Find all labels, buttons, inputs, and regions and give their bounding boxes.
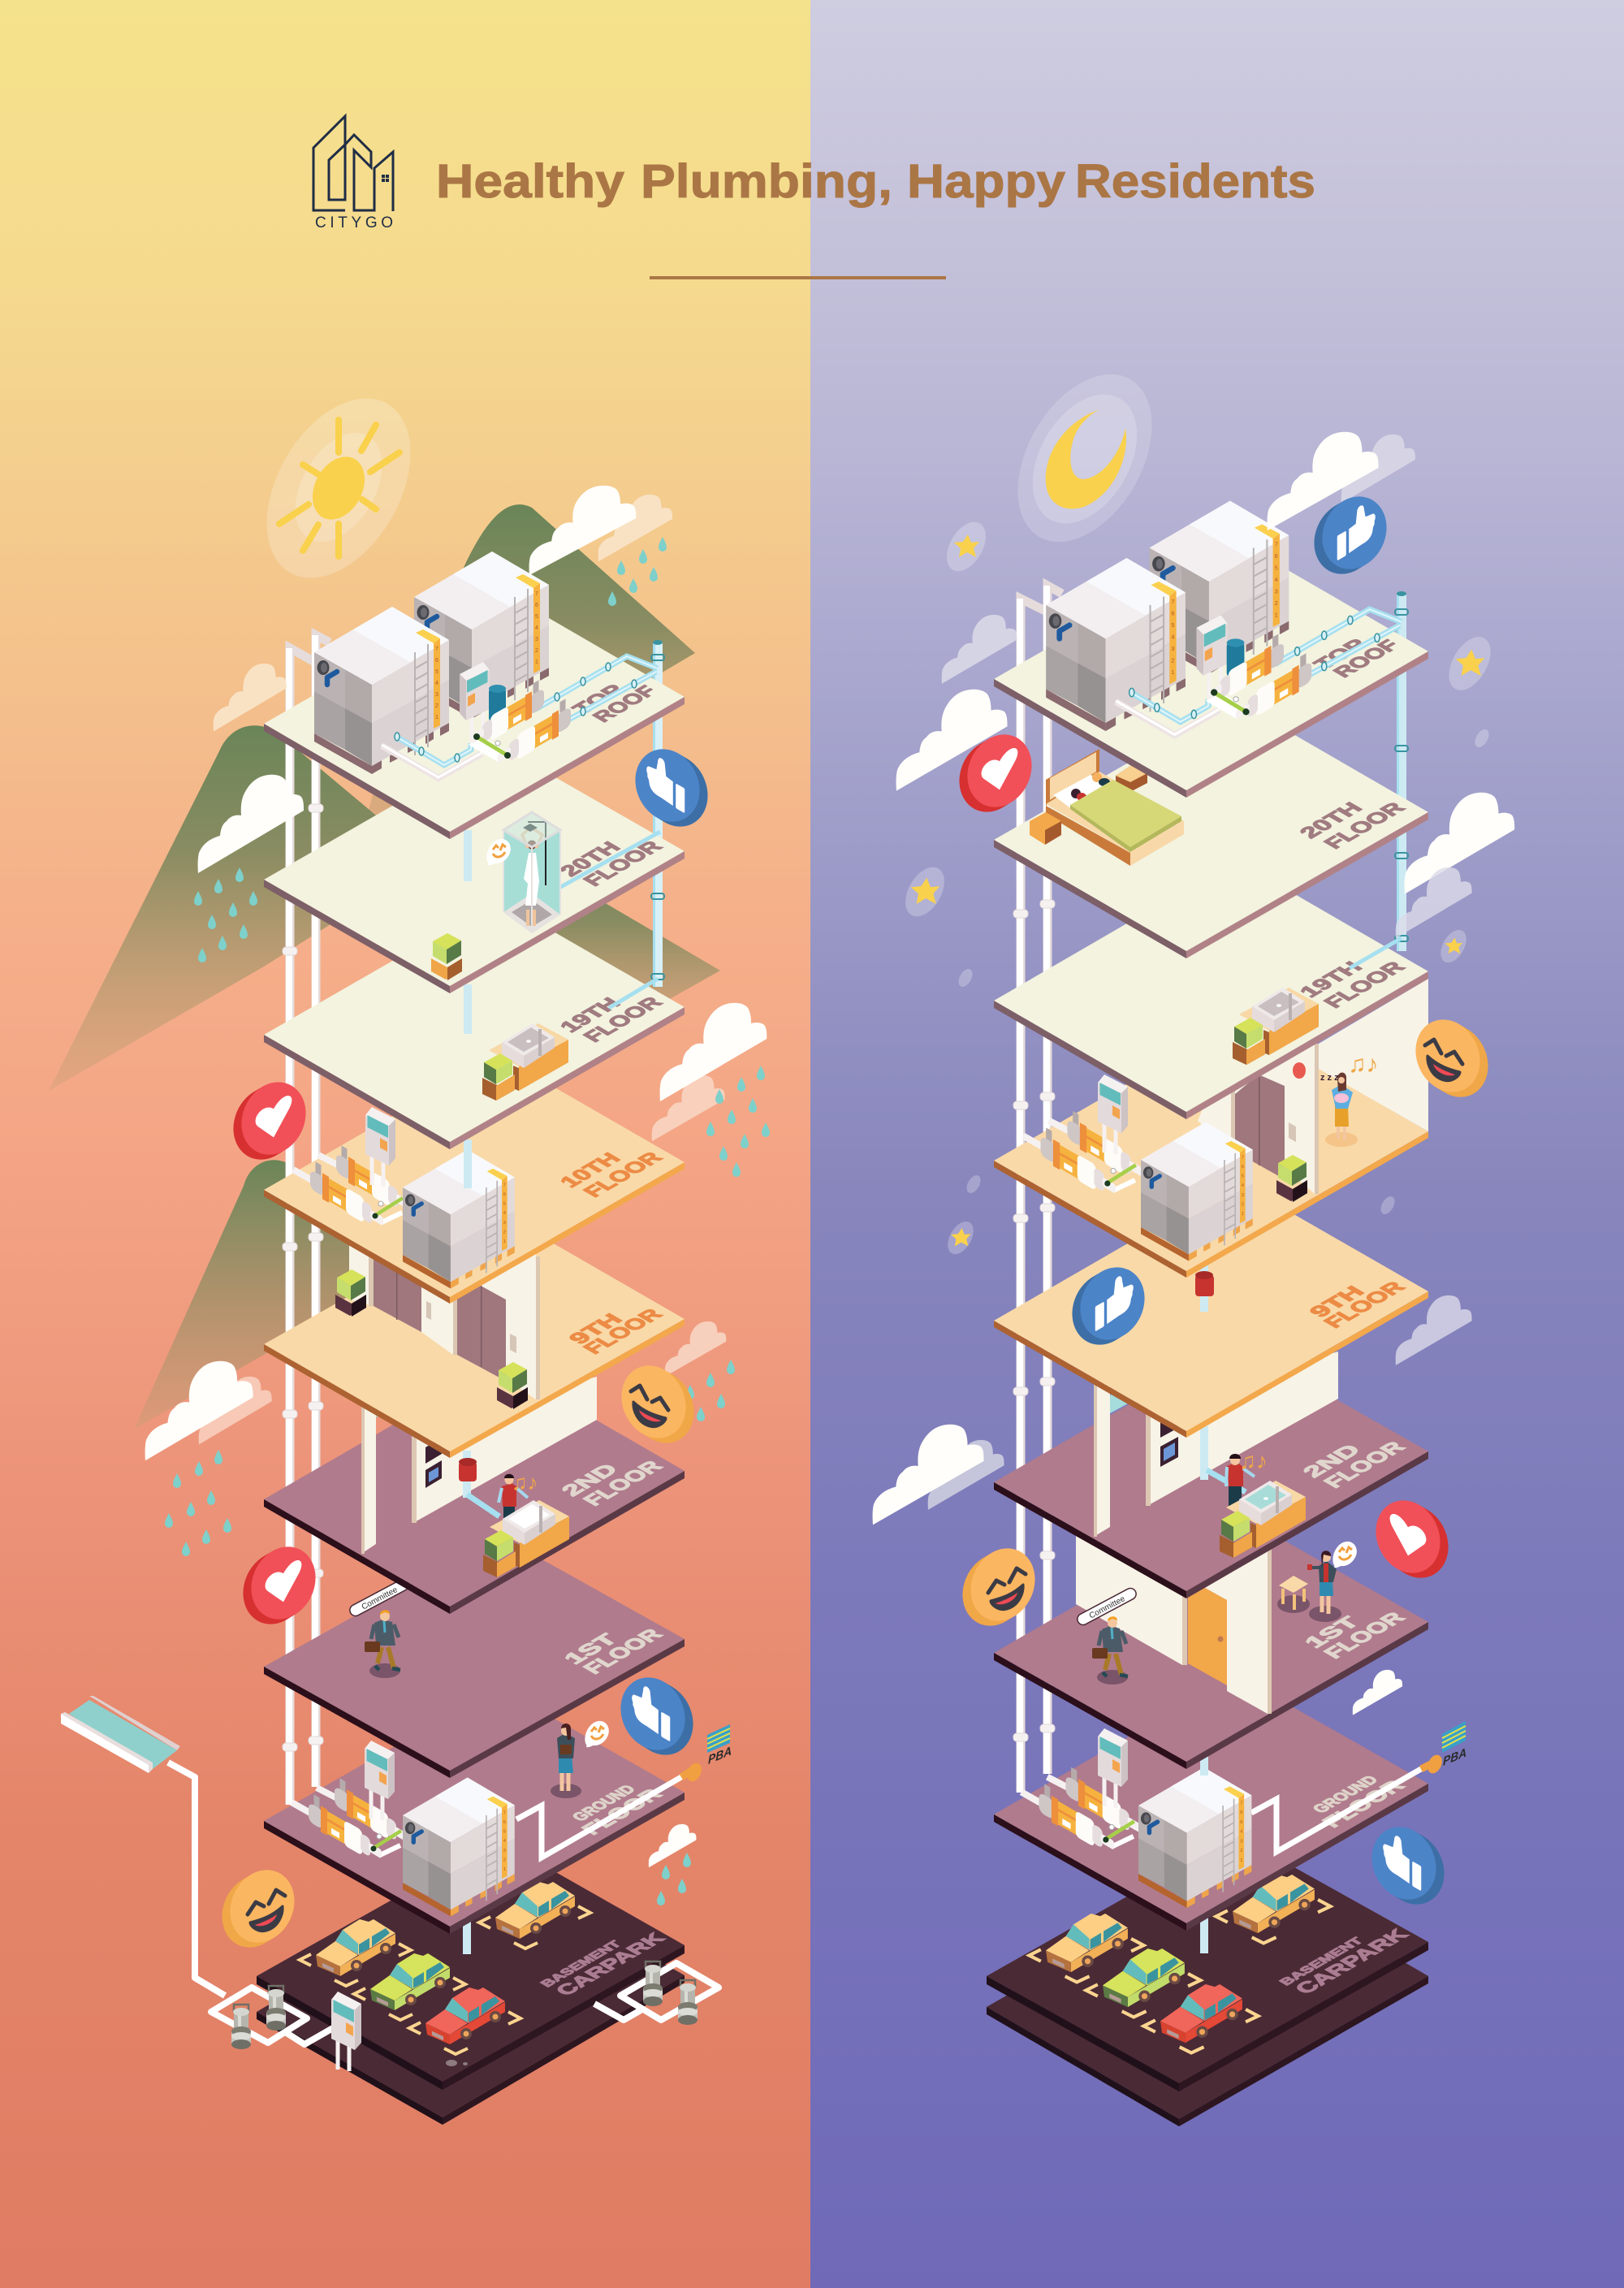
left: blue branch and red valve <box>459 1451 499 1516</box>
right: smile badge upper <box>1404 1009 1500 1108</box>
left: 20th floor slab <box>264 745 685 993</box>
right: parked cars <box>1029 1875 1331 2052</box>
left: smile badge lower <box>210 1859 306 1958</box>
right: roof equipment <box>1046 501 1402 735</box>
left: 20th blue branch <box>558 832 660 889</box>
right column: blue riser <box>1395 591 1408 951</box>
left: basement control panel <box>331 1992 361 2071</box>
left: plant by elevator <box>335 1269 366 1317</box>
left: tenth floor label: FLOOR <box>577 1148 667 1200</box>
left: valve at mains <box>681 1761 704 1784</box>
left: like badge lower <box>609 1667 705 1766</box>
left: roof label <box>568 681 662 725</box>
left: ninth floor label: FLOOR <box>577 1305 667 1357</box>
left: smile badge right <box>610 1355 706 1454</box>
mountain right of 20th floor <box>455 853 720 1056</box>
left: oil stains <box>446 2060 468 2066</box>
background: night side <box>810 0 1624 2288</box>
left: tenth floor slab <box>264 1055 685 1304</box>
right: snore and music: z z z <box>1320 1073 1339 1083</box>
right: ninth floor label: 9TH <box>1303 1282 1370 1321</box>
left: ground floor panel <box>365 1741 395 1820</box>
left: 20th floor label: 20TH <box>554 838 626 880</box>
left: stub under 19th <box>464 1140 472 1188</box>
right: 20th floor label: FLOOR <box>1318 798 1410 852</box>
right: businessman <box>1092 1616 1128 1685</box>
right: basement label: CARPARK <box>1290 1926 1413 1997</box>
left: speech bubble in shower <box>486 839 511 865</box>
right: ground floor pump set <box>1021 1764 1141 1858</box>
right: heart badge upper <box>948 724 1043 823</box>
right: tenth floor room walls and elevator <box>1198 979 1428 1194</box>
left: 20th floor label: FLOOR <box>577 837 667 889</box>
left: filter units <box>231 1961 698 2049</box>
right: valve at mains <box>1421 1753 1445 1775</box>
title: Residents <box>1075 155 1315 208</box>
left: like badge top <box>624 738 719 837</box>
left: second floor walls <box>361 1377 597 1554</box>
right: basement label <box>1277 1926 1413 1997</box>
right: stub under 19th <box>1200 945 1208 1001</box>
right: stub below ground floor <box>1200 1913 1208 1953</box>
right: 19th floor label: FLOOR <box>1318 958 1410 1011</box>
left: ground floor pump set <box>292 1775 408 1867</box>
title: Plumbing, <box>641 155 892 208</box>
right: tenth floor pump set <box>1023 1108 1142 1202</box>
sun <box>237 374 440 603</box>
right: roof slab <box>994 540 1428 798</box>
right: bed with sleeping couple <box>1030 749 1184 866</box>
left: stub under roof <box>464 830 472 881</box>
right: plant in room <box>1276 1155 1307 1202</box>
right: 19th floor slab <box>994 860 1428 1119</box>
left: roof equipment <box>314 551 658 778</box>
right: ground floor label: FLOOR <box>1316 1776 1410 1831</box>
right: speech bubble <box>1332 1542 1357 1568</box>
left: heart badge upper <box>222 1071 317 1170</box>
right: 20th floor label <box>1294 798 1410 852</box>
right: roof label <box>1309 636 1404 681</box>
left: first floor label: FLOOR <box>577 1625 667 1677</box>
right: smile badge lower <box>951 1538 1047 1637</box>
right: first floor slab <box>994 1513 1428 1769</box>
left: 19th floor slab <box>264 900 685 1149</box>
left: woman on ground floor <box>551 1724 581 1798</box>
right: PBA logo <box>1442 1721 1466 1769</box>
left: 19th vanity <box>482 1023 568 1101</box>
right column: vertical risers <box>1013 586 1062 1793</box>
right: ninth floor label: FLOOR <box>1318 1278 1410 1331</box>
right: first floor label: FLOOR <box>1318 1608 1410 1662</box>
left: shower cabin with woman <box>503 812 560 933</box>
right: 19th floor label <box>1294 958 1410 1011</box>
right: mother with baby <box>1325 1072 1358 1147</box>
title: Healthy <box>436 155 624 208</box>
right: like badge middle <box>1060 1256 1156 1356</box>
right: basement upper slab <box>987 1835 1428 2091</box>
right: 20th floor label: 20TH <box>1294 798 1367 841</box>
left: businessman <box>365 1610 400 1678</box>
right: stub under 20th <box>1200 788 1208 840</box>
mountain lower left <box>134 1160 361 1429</box>
title: Happy <box>907 155 1065 208</box>
right: 19th vanity <box>1233 988 1319 1065</box>
left: basement label: BASEMENT <box>538 1939 624 1989</box>
right: woman with cup <box>1307 1551 1341 1622</box>
right: tenth floor tank <box>1141 1122 1253 1261</box>
right: tenth floor slab <box>994 1021 1428 1278</box>
right: committee sign <box>1075 1586 1138 1627</box>
right: second floor walls <box>1094 1352 1338 1537</box>
background: day side <box>0 0 810 2288</box>
mountain behind roof <box>357 504 695 853</box>
right: woman washing <box>1226 1454 1255 1508</box>
right: second floor label: FLOOR <box>1318 1438 1410 1491</box>
left: plant on ninth floor <box>497 1362 528 1409</box>
left: tenth floor label: 10TH <box>554 1149 626 1191</box>
right: ninth floor slab <box>994 1181 1428 1438</box>
left column: blue riser <box>651 640 664 987</box>
right: heart badge lower <box>1364 1490 1460 1589</box>
mountain left <box>49 725 430 1091</box>
right: snore and music: ♫♪ <box>1348 1051 1379 1078</box>
left: first floor label: 1ST <box>558 1630 623 1667</box>
right: second floor label <box>1297 1438 1410 1491</box>
right: ground floor supply pipe <box>1251 1769 1421 1852</box>
CityGo logo <box>313 116 393 231</box>
left: roof slab <box>264 589 685 839</box>
left: first floor slab <box>264 1535 685 1778</box>
left: woman washing <box>499 1474 528 1523</box>
left: PBA logo: PBA <box>708 1744 732 1767</box>
left: rain drops <box>165 537 770 1905</box>
left: basement label: CARPARK <box>551 1930 671 1999</box>
left: 19th floor label: FLOOR <box>577 993 667 1045</box>
right: second floor vanity <box>1220 1481 1306 1558</box>
left: second floor slab <box>264 1364 685 1614</box>
right: ground floor tank <box>1138 1767 1251 1908</box>
right: first floor label: 1ST <box>1298 1613 1365 1651</box>
stars in bubbles <box>897 515 1499 1259</box>
CityGo logo: CITYGO <box>315 214 393 231</box>
left: PBA logo <box>707 1724 732 1767</box>
left: roof label: ROOF <box>588 682 662 725</box>
right: basement label: BASEMENT <box>1277 1936 1367 1987</box>
right: roof label: ROOF <box>1328 637 1404 681</box>
left: stub under 20th <box>464 984 472 1034</box>
left: parked cars <box>300 1882 590 2054</box>
right: 19th blue branch <box>1350 938 1402 968</box>
right: snore and music <box>1320 1051 1379 1083</box>
left: tenth floor pump set <box>293 1143 409 1235</box>
left: ground floor tank <box>403 1778 515 1917</box>
left: second floor vanity <box>483 1500 569 1577</box>
left: stub below ground floor <box>463 1917 471 1954</box>
left: basement lower slab <box>257 1870 685 2125</box>
left: ground floor label: FLOOR <box>576 1785 667 1838</box>
left: music notes: ♫♪ <box>512 1470 538 1494</box>
right: like badge lower <box>1360 1816 1456 1915</box>
left: stub below first floor <box>463 1600 471 1659</box>
left: clouds <box>145 486 767 1867</box>
right: music notes: ♫♪ <box>1239 1448 1268 1473</box>
left: basement upper slab <box>257 1840 685 2090</box>
right: roof label: TOP <box>1309 636 1372 673</box>
left column: vertical risers <box>283 635 330 1805</box>
left: ground floor slab <box>264 1687 685 1934</box>
left: ninth floor slab <box>264 1212 685 1458</box>
right: like badge top <box>1302 486 1398 585</box>
left: 19th floor label: 19TH <box>554 994 626 1036</box>
left: committee sign <box>348 1577 411 1618</box>
right: stub and red valve <box>1195 1263 1214 1312</box>
left: 19th blue branch <box>609 979 658 1008</box>
right: ground floor panel <box>1098 1728 1128 1808</box>
right: stub below first floor <box>1200 1754 1208 1775</box>
right: PBA logo: PBA <box>1443 1745 1466 1769</box>
left: water main pipes and filters <box>168 1762 719 2044</box>
moon <box>990 351 1180 565</box>
left: ground floor supply pipe <box>516 1777 681 1858</box>
left: elevator wall <box>349 1235 540 1399</box>
left: roof gutter <box>61 1696 180 1773</box>
left: second floor label: FLOOR <box>577 1457 667 1509</box>
left: second floor label: 2ND <box>555 1460 623 1499</box>
right: tenth floor panel <box>1098 1075 1128 1154</box>
left: tenth floor tank <box>403 1150 515 1288</box>
right: second floor slab <box>994 1343 1428 1598</box>
right: second floor label: 2ND <box>1297 1441 1366 1481</box>
right: ground floor slab <box>994 1675 1428 1931</box>
title <box>436 155 1315 208</box>
right: 19th floor label: 19TH <box>1294 958 1367 1001</box>
left: basement label <box>538 1930 671 1999</box>
left: heart badge lower <box>231 1536 327 1635</box>
right: clouds <box>873 432 1514 1715</box>
right: 20th floor slab <box>994 701 1428 958</box>
right: ground floor label: GROUND <box>1309 1773 1382 1816</box>
left: ninth floor label: 9TH <box>563 1310 628 1347</box>
left: tenth floor panel <box>365 1107 395 1187</box>
left: speech bubble <box>585 1721 609 1747</box>
right: basement lower slab <box>987 1864 1428 2126</box>
left: roof label: TOP <box>568 681 629 717</box>
left: ground floor label: GROUND <box>568 1783 640 1824</box>
right: blue branch <box>1200 1426 1246 1492</box>
right: first floor office wall and door <box>1076 1527 1272 1714</box>
right: stool <box>1277 1576 1310 1613</box>
faint floating dots <box>956 727 1492 1217</box>
left: plant on 20th <box>431 933 462 980</box>
title underline <box>650 276 946 279</box>
